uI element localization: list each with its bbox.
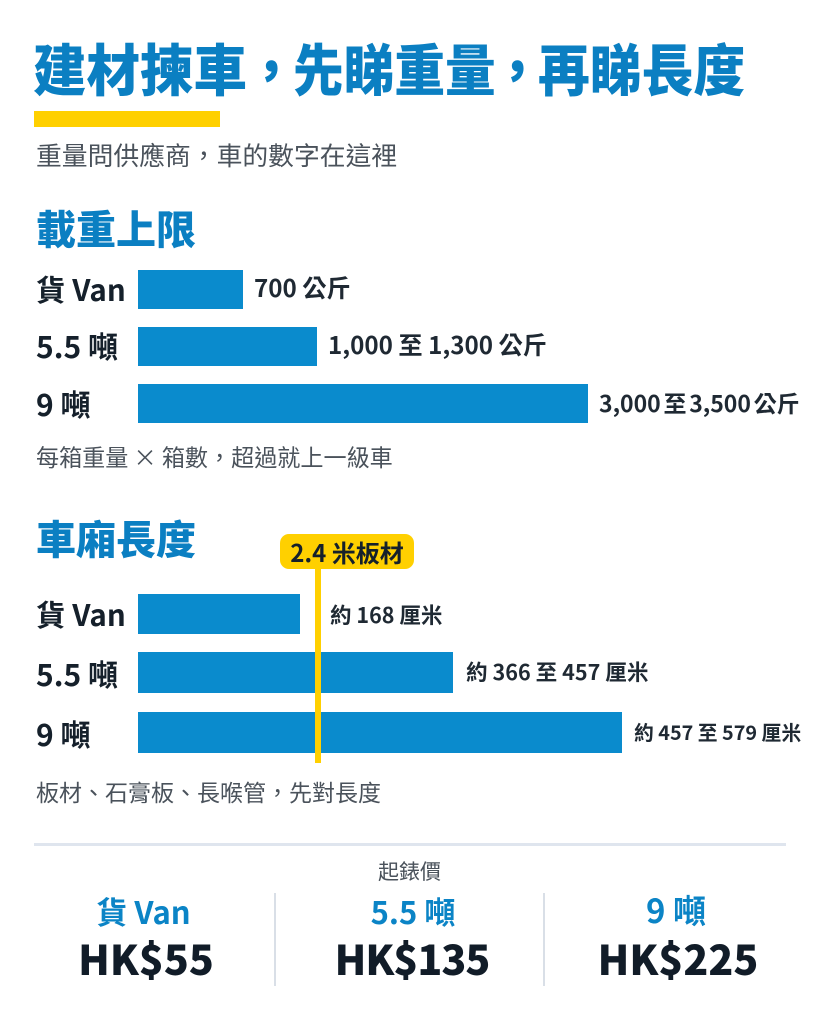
row: van payload: 700 公斤 [254,269,351,304]
payload note: 每箱重量 × 箱數，超過就上一級車 [36,439,393,473]
title [33,27,745,108]
title: 建材揀車 [33,27,247,108]
row: 9 ton length [36,711,801,755]
row: 5.5 ton payload: 5.5 噸 [36,323,118,367]
divider [34,843,786,846]
title accent bar [34,111,220,127]
price: 9 ton: 9 噸 [646,885,706,933]
row: 5.5 ton length: 5.5 噸 [36,651,118,695]
row: 9 ton payload: 9 噸 [36,381,91,425]
price: van [78,888,214,987]
title: 先睇重量 [292,27,495,108]
row: 5.5 ton payload: 1,000 至 1,300 公斤 [328,326,547,361]
length note: 板材、石膏板、長喉管，先對長度 [36,774,381,808]
panel: starting prices [78,885,758,987]
row: van payload [36,268,351,310]
row: 9 ton length: 約 457 至 579 厘米 [634,717,801,746]
row: van payload: 貨 Van [36,268,126,310]
title: ， [246,27,296,108]
row: van length: 約 168 厘米 [330,599,442,630]
subtitle: 重量問供應商，車的數字在這裡 [36,136,397,173]
row: van length [36,593,442,635]
title: ， [492,27,542,108]
price: van: HK$55 [78,927,214,987]
heading: payload: 載重上限 [36,198,196,256]
price: van: 貨 Van [96,888,191,933]
row: 5.5 ton length [36,651,648,695]
price: 9 ton: HK$225 [598,927,758,987]
price: 5.5 ton: HK$135 [335,927,489,987]
row: 9 ton payload: 3,000 至 3,500 公斤 [599,385,800,419]
row: 9 ton length: 9 噸 [36,711,91,755]
row: 5.5 ton length: 約 366 至 457 厘米 [466,656,648,687]
2.4 m marker line [315,565,321,763]
title: 再睇長度 [538,27,745,108]
price: 9 ton [598,885,758,987]
price: 5.5 ton [335,888,489,987]
panel: payload limit [36,198,800,473]
row: van length: 貨 Van [36,593,126,635]
row: 9 ton payload [36,381,800,425]
panel: cargo length [36,508,801,808]
starting price caption: 起錶價 [378,856,441,886]
row: 5.5 ton payload [36,323,547,367]
heading: length: 車廂長度 [36,508,196,566]
price: 5.5 ton: 5.5 噸 [371,888,455,933]
2.4 m marker label: 2.4 米板材 [290,534,404,569]
